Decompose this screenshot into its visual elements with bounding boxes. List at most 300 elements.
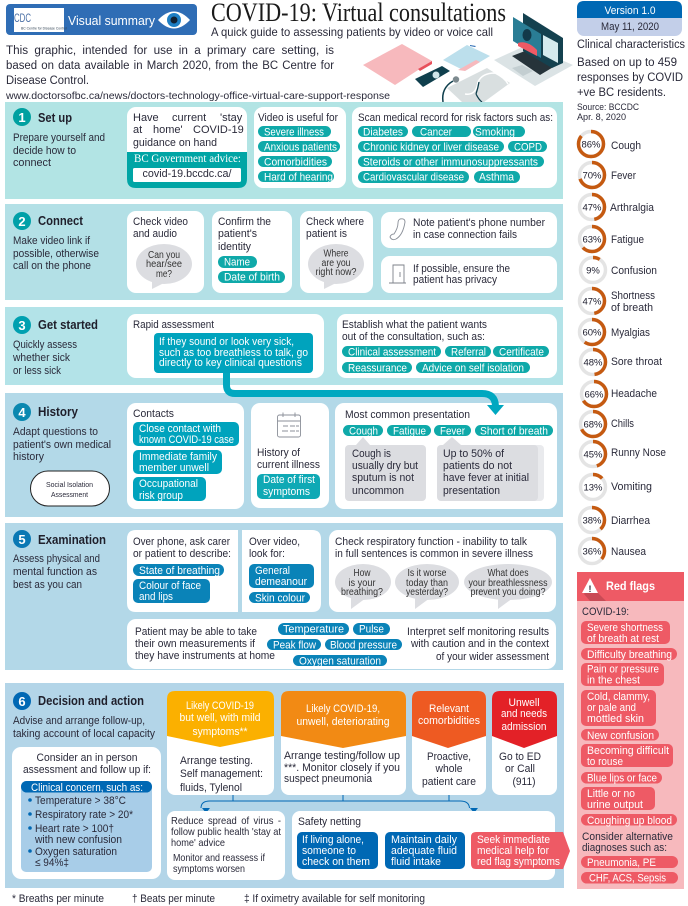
donut: runny nose 45%: Runny Nose [611,447,666,459]
card: self measurements: Blood pressure [330,640,397,652]
card: video is useful for: Severe illness [264,126,324,138]
card: medical record risk factors: COPD [514,142,542,154]
card: stay at home guidance: guidance on hand [133,137,217,149]
description [12,339,77,377]
card: stay at home guidance: current [172,112,206,124]
social isolation assessment pill: Social Isolation [46,482,93,489]
card: self measurements: with caution and in the context [410,638,549,650]
donut: arthralgia 47%: 47% [582,202,602,214]
speech bubble: is it worse [395,564,459,609]
clinical characteristics heading: Clinical characteristics [577,39,685,51]
card: patient wants: Clinical assessment [348,346,436,358]
header badge: visual summary: Visual summary [68,13,155,28]
social isolation assessment pill: Assessment [51,492,88,499]
card: check where patient is [300,211,373,293]
card: over phone: Colour of face [139,580,201,592]
decision card: likely covid unwell deteriorating: Arrange testing/follow up [284,750,400,762]
panel: step 3 get started [5,307,563,385]
box: living alone [297,832,378,869]
footnotes [12,893,425,905]
covid-19 red flag list: New confusion [587,730,654,742]
note: fever: have fever at initial [443,472,529,484]
donut: headache 66%: 66% [584,390,604,400]
speech bubble [308,244,364,289]
card: reduce spread: follow public health 'stay at [171,826,281,838]
card: stay at home guidance: Have [133,112,159,124]
alternative diagnoses: CHF, ACS, Sepsis [589,872,666,884]
card: self measurements: Temperature [283,624,344,636]
card: rapid assessment [127,314,324,378]
card: check where patient is: patient is [306,228,347,240]
description [13,132,105,169]
card: patient wants [337,314,557,378]
card: contacts: Contacts [133,408,174,420]
version badge [577,1,682,36]
heading: connect: Connect [38,214,84,228]
card: in person assessment: assessment and follow up if: [23,764,151,776]
panel: step 1 set up [5,102,563,199]
decision card: unwell needs admission: and needs [501,708,547,720]
card: in person assessment: Consider an in person [36,752,138,764]
clinical characteristics description: Apr. 8, 2020 [577,112,626,122]
chart: symptom prevalence donuts [578,132,666,564]
description: patient's own medical [13,439,111,451]
decision card: unwell needs admission: admission [502,721,546,733]
card: respiratory function: Check respiratory function - inability to talk [335,536,527,548]
donut: vomiting 13%: 13% [583,482,603,494]
card: stay at home guidance: covid-19.bccdc.ca/ [142,168,232,180]
description [13,715,155,740]
donut: diarrhea 38% [580,508,651,532]
card: phone number: in case connection fails [413,229,517,241]
covid-19 red flag list: in the chest [587,674,640,686]
card: over video: General [255,565,290,577]
card: patient wants: Referral [451,346,486,358]
card: confirm identity: identity [218,241,251,253]
card: self measurements: of your wider assessment [436,651,549,663]
header badge: visual summary: CDC [14,11,31,25]
speech bubble: how is your breathing: is your [348,578,376,589]
card: reduce spread: home' advice [171,837,225,849]
donut: arthralgia 47% [580,194,655,220]
card: history of current illness: History of [257,447,301,459]
step number 6: 6 [18,694,26,709]
donut: fatigue 63%: Fatigue [611,234,644,246]
clinical concern list: Heart rate > 100† [35,823,114,835]
card: self measurements: Peak flow [273,640,316,652]
card: check video and audio [127,211,204,293]
covid-19 red flag list: Cold, clammy, [587,691,650,703]
social isolation assessment pill [30,471,110,506]
donut: confusion 9%: 9% [586,266,600,276]
description: whether sick [12,352,70,364]
alternative diagnoses: diagnoses such as: [582,842,667,854]
donut: headache 66%: Headache [611,388,657,400]
decision card: relevant comorbidities: patient care [422,776,476,788]
note: fever: Up to 50% of [443,448,505,460]
note: cough: Cough is [352,448,391,460]
red flags header: Red flags [606,581,655,593]
card: contacts: Immediate family [139,451,217,463]
card: patient wants: out of the consultation, such as: [342,331,485,343]
card: over video: look for: [249,548,285,560]
donut: diarrhea 38%: Diarrhea [611,515,651,527]
footnotes: ‡ If oximetry available for self monitoring [244,893,425,905]
intro paragraph: Disease Control. [6,75,89,87]
step number 2 [13,212,31,230]
donut: chills 68%: 68% [583,420,603,430]
card: over phone: State of breathing [139,565,220,577]
decision card: likely covid unwell deteriorating: unwell, deteriorating [296,716,390,728]
donut: chills 68%: Chills [611,418,634,430]
description [13,553,100,591]
version badge: Version 1.0 [604,5,656,17]
donut: vomiting 13% [580,474,652,500]
card: patient wants: Advice on self isolation [422,362,524,374]
card: contacts: Occupational [139,478,198,490]
decision card: unwell needs admission: Go to ED [499,751,541,763]
card: safety netting [292,811,570,880]
speech bubble: what does your breathlessness prevent: What does [488,568,528,579]
card: video is useful for [254,107,346,188]
card: contacts: member unwell [139,462,209,474]
note: fever [437,437,544,501]
card: medical record risk factors: Diabetes [363,126,403,138]
card: over phone: and lips [139,591,173,603]
decision card: relevant comorbidities [412,691,486,795]
donut: headache 66% [582,382,657,406]
donut: runny nose 45%: 45% [583,450,603,460]
covid-19 red flag list: Pain or pressure [587,664,659,676]
card: confirm identity: Name [224,256,250,268]
speech bubble: how is your breathing: How [354,568,371,579]
red flags header [577,572,684,601]
description: Assess physical and [13,553,100,565]
clinical concern list [21,781,152,872]
donut: fever 70% [580,162,636,188]
clinical concern list: Clinical concern, such as: [31,782,143,794]
card: over video [242,530,321,612]
card: medical record risk factors: Steroids or other immunosuppressants [363,156,538,168]
intro paragraph [6,45,334,87]
clinical characteristics description: Source: BCCDC [577,102,639,112]
donut: sore throat 48% [580,350,662,374]
card: most common presentation: Fatigue [393,426,426,438]
card: contacts: Close contact with [139,423,221,435]
speech bubble: what does your breathlessness prevent [464,564,552,609]
box: living alone: check on them [302,856,370,868]
step number 5: 5 [18,532,26,547]
description: taking account of local capacity [13,728,155,740]
clinical concern list: Respiratory rate > 20* [35,809,134,821]
footnotes: † Beats per minute [132,893,215,905]
covid-19 red flag list [581,606,677,827]
card: self measurements: Interpret self monitoring results [407,626,549,638]
arrow: rapid assessment to key clinical questions [226,373,504,415]
decision card: likely covid unwell deteriorating: suspect pneumonia [284,773,373,785]
decision card: likely covid but well: but well, with mild [180,712,260,724]
clinical concern list: with new confusion [34,834,122,846]
note: cough: usually dry but [352,460,418,472]
card: video is useful for: Video is useful for [258,112,338,124]
card: reduce spread: symptoms worsen [173,863,245,875]
box: living alone: If living alone, [302,834,364,846]
description: call on the phone [13,260,91,272]
card: most common presentation: Cough [349,426,378,438]
card: patient wants: Reassurance [348,362,407,374]
note: fever: patients do not [443,460,512,472]
subtitle: A quick guide to assessing patients by video or voice call [211,25,493,39]
description: best as you can [13,579,82,591]
decision card: likely covid but well: fluids, Tylenol [180,782,242,794]
icon: calendar [278,412,300,437]
decision card: likely covid but well: Likely COVID-19 [186,700,254,712]
decision card: likely covid but well [167,691,274,795]
card: self measurements: Patient may be able to take [135,626,257,638]
panel: step 2 connect [5,204,563,300]
step number 4 [13,403,31,421]
speech bubble: right now? [316,267,357,278]
heading: get started: Get started [38,318,98,332]
panel: step 4 history [5,393,563,517]
covid-19 red flag list: Little or no [587,788,635,800]
donut: vomiting 13%: Vomiting [611,481,652,493]
decision card: unwell needs admission: (911) [512,776,536,788]
donut: fever 70%: Fever [611,170,636,182]
note: cough: uncommon [352,485,404,497]
description: connect [13,157,51,169]
heading: decision and action: Decision and action [38,694,144,708]
box: maintain fluid intake: fluid intake [391,856,441,868]
decision card: relevant comorbidities: Relevant [429,703,469,715]
card: medical record risk factors: Asthma [479,172,515,184]
card: rapid assessment: directly to key clinical questions [159,357,302,369]
card: medical record risk factors: Cancer [420,126,452,138]
card: contacts [127,403,244,509]
card: rapid assessment: Rapid assessment [133,319,214,331]
intro paragraph: based on data available in March 2020, from the BC Centre for [6,60,334,72]
donut: cough 86%: Cough [611,140,641,152]
card: over phone: Over phone, ask carer [133,536,230,548]
icon: door [389,265,406,283]
clinical characteristics description [577,57,683,122]
decision card: unwell needs admission: or Call [505,763,535,775]
covid-19 red flag list: of breath at rest [587,633,659,645]
card: rapid assessment: If they sound or look very sick, [159,336,294,348]
card: self measurements: Pulse [359,624,384,636]
donut: shortness of breath 47% [580,288,655,314]
card: over phone [127,530,238,612]
card: stay at home guidance [127,107,247,188]
covid-19 red flag list: COVID-19: [582,606,629,618]
donut: sore throat 48%: Sore throat [611,356,662,368]
speech bubble: how is your breathing: breathing? [341,587,383,598]
donut: fever 70%: 70% [582,170,602,182]
donut: nausea 36% [580,538,647,564]
intro paragraph: This graphic, intended for use in a primary care setting, is [6,45,334,57]
step number 2: 2 [18,214,26,229]
card: self measurements: they have instruments at home [135,650,275,662]
note: fever: presentation [443,485,500,497]
decision card: likely covid unwell deteriorating: ***. Monitor closely if you [284,762,400,774]
card: check video and audio: Check video [133,216,188,228]
card: patient wants: Establish what the patient wants [342,319,487,331]
card: check video and audio: and audio [133,228,177,240]
card: reduce spread: Reduce spread of virus - [171,815,281,827]
decision card: likely covid unwell deteriorating: Likely COVID-19, [306,703,380,715]
description: Quickly assess [13,339,77,351]
box: maintain fluid intake: Maintain daily [391,834,457,846]
card: confirm identity: Date of birth [224,272,280,284]
covid-19 red flag list: or pale and [587,702,636,714]
card: self measurements: their own measurements if [135,638,256,650]
speech bubble: what does your breathlessness prevent: prevent you doing? [470,587,546,598]
donut: myalgias 60%: Myalgias [611,327,650,339]
speech bubble: hear/see [146,259,182,270]
speech bubble: are you [322,258,350,269]
speech bubble [136,244,192,289]
alternative diagnoses: Pneumonia, PE [587,857,656,869]
card: most common presentation: Short of breath [480,426,548,438]
card: reduce spread: Monitor and reassess if [173,852,265,864]
donut: diarrhea 38%: 38% [582,516,602,526]
decision card: unwell needs admission [492,691,557,795]
card: over video: Over video, [249,536,300,548]
card: medical record risk factors: Scan medical record for risk factors such as: [358,112,553,124]
heading: examination: Examination [38,533,106,547]
clinical concern list: Oxygen saturation [35,846,117,858]
description: Adapt questions to [13,426,98,438]
donut: confusion 9%: Confusion [611,265,657,277]
card: stay at home guidance: at [133,124,142,136]
card: check where patient is: Check where [306,216,364,228]
card: stay at home guidance: COVID-19 [193,124,244,136]
card: medical record risk factors: Cardiovascular disease [363,172,464,184]
description: Make video link if [13,235,91,247]
card: self measurements [127,619,556,669]
card: safety netting: Safety netting [298,816,361,828]
panel: step 6 decision and action [5,683,570,888]
alternative diagnoses: Consider alternative [582,831,673,843]
donut: myalgias 60% [580,320,650,344]
clinical characteristics description: +ve BC residents. [577,87,666,99]
box: seek immediate help: Seek immediate [477,834,550,846]
card: stay at home guidance: 'stay [220,112,243,124]
card: contacts: risk group [139,490,183,502]
box: seek immediate help: red flag symptoms [477,856,560,868]
donut: fatigue 63% [580,226,644,252]
box: maintain fluid intake [385,832,465,869]
card: history of current illness: symptoms [263,486,310,498]
card: contacts: known COVID-19 case [139,434,234,446]
donut: shortness of breath 47%: 47% [582,296,602,308]
card: history of current illness: Date of first [263,474,315,486]
decision card: likely covid but well: symptoms** [192,726,248,738]
donut: runny nose 45% [580,442,666,466]
covid-19 red flag list: urine output [587,799,643,811]
card: most common presentation: Most common presentation [345,409,470,421]
card: medical record risk factors: Chronic kidney or liver disease [363,142,499,154]
speech bubble: Where [324,248,349,260]
card: over phone: or patient to describe: [133,548,231,560]
decision card: likely covid but well: Self management: [180,768,263,780]
decision card: relevant comorbidities: comorbidities [418,715,480,727]
card: video is useful for: Comorbidities [264,156,327,168]
donut: nausea 36%: 36% [582,546,602,558]
card: history of current illness [251,403,329,508]
step number 3: 3 [18,318,26,333]
card: respiratory function [329,530,556,612]
box: living alone: someone to [302,845,356,857]
version badge: May 11, 2020 [601,21,659,33]
panel: step 5 examination [5,523,563,670]
box: maintain fluid intake: adequate fluid [391,845,457,857]
covid-19 red flag list: Severe shortness [587,622,663,634]
decision card: relevant comorbidities: whole [435,763,462,775]
card: video is useful for: Hard of hearing [264,172,333,184]
description [13,426,111,463]
description: decide how to [13,145,76,157]
donut: shortness of breath 47%: of breath [611,302,653,314]
covid-19 red flag list: to rouse [587,756,623,768]
donut: confusion 9% [580,258,657,282]
speech bubble: is it worse: today than [406,578,448,589]
illustration: medical desk with laptop, stethoscope, phone and folder [363,13,573,102]
donut: sore throat 48%: 48% [583,358,603,368]
card: patient wants: Certificate [499,346,544,358]
covid-19 red flag list: Blue lips or face [587,772,657,784]
card: privacy: patient has privacy [413,274,497,286]
decision card: likely covid unwell deteriorating [281,691,406,795]
speech bubble: is it worse: yesterday? [406,587,448,598]
card: phone number [381,212,557,248]
card: medical record risk factors: Smoking [475,126,515,138]
clinical characteristics description: responses by COVID [577,72,683,84]
source url: www.doctorsofbc.ca/news/doctors-technology-office-virtual-care-support-response [5,90,390,102]
covid-19 red flag list: mottled skin [587,713,644,725]
step number 1 [13,108,31,126]
clinical characteristics description: Based on up to 459 [577,57,677,69]
note: cough: sputum is not [352,472,414,484]
card: stay at home guidance: BC Government advice: [134,153,241,165]
covid-19 red flag list: Coughing up blood [587,815,672,827]
description: Advise and arrange follow-up, [13,715,145,727]
description: Prepare yourself and [13,132,105,144]
donut: arthralgia 47%: Arthralgia [610,202,655,214]
heading: set up: Set up [38,111,72,125]
donut: cough 86% [578,132,641,156]
card: most common presentation: Fever [440,426,465,438]
card: most common presentation [335,403,557,509]
card: privacy [381,256,557,293]
header badge: visual summary: BC Centre for Disease Control [21,26,67,30]
donut: cough 86%: 86% [581,140,601,150]
card: self measurements: Oxygen saturation [299,656,381,668]
card: in person assessment [12,747,161,879]
clinical concern list: Temperature > 38°C [35,795,126,807]
card: respiratory function: in full sentences is common in severe illness [335,548,533,560]
step number 3 [13,316,31,334]
step number 4: 4 [18,405,26,420]
covid-19 red flag list: Becoming difficult [587,745,669,757]
header badge: visual summary [6,4,197,35]
step number 5 [13,530,31,548]
speech bubble: Can you [148,250,180,261]
step number 6 [13,692,31,710]
clinical concern list: ≤ 94%‡ [35,857,69,869]
box: seek immediate help [471,832,570,869]
description: possible, otherwise [13,248,99,260]
